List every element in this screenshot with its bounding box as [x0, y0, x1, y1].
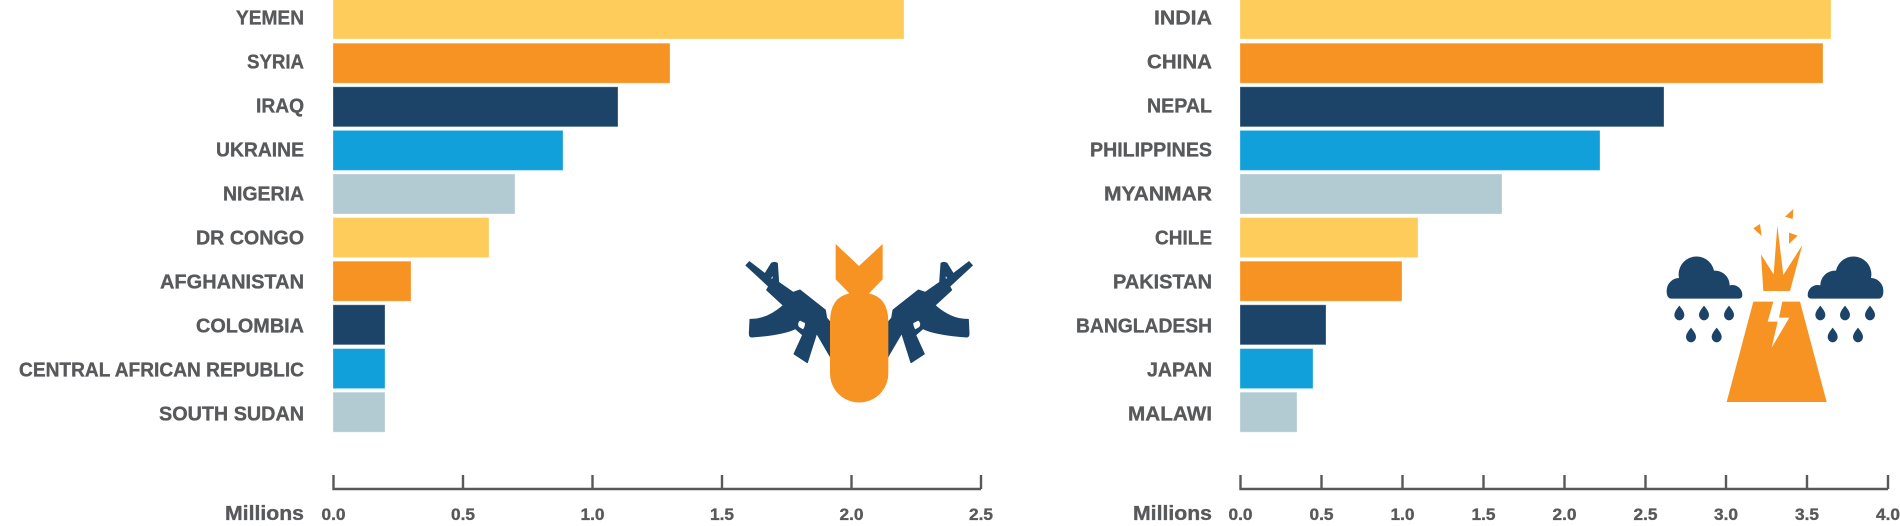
country labels: disasters: MALAWI — [1128, 404, 1212, 426]
country labels: disasters — [1076, 7, 1213, 426]
country labels: conflict: DR CONGO — [196, 228, 304, 250]
icon: right rifle — [888, 262, 972, 363]
axis: conflict: 2.0 — [840, 505, 864, 524]
axis: disasters: 2.0 — [1552, 505, 1576, 524]
axis: conflict: Millions — [225, 503, 304, 525]
country labels: disasters: PAKISTAN — [1113, 272, 1212, 294]
axis: disasters: 4.0 — [1876, 505, 1900, 524]
country labels: disasters: MYANMAR — [1104, 184, 1213, 206]
axis: conflict — [225, 475, 993, 525]
axis: disasters: 1.0 — [1390, 505, 1414, 524]
icon: volcano with rain clouds — [1667, 209, 1883, 402]
panel: disasters chart — [1076, 0, 1900, 525]
country labels: conflict: UKRAINE — [216, 139, 304, 161]
country labels: disasters: PHILIPPINES — [1090, 139, 1212, 161]
country labels: conflict: YEMEN — [236, 7, 304, 29]
country labels: disasters: JAPAN — [1147, 360, 1212, 382]
country labels: disasters: CHILE — [1155, 228, 1212, 250]
bar chart: conflict — [333, 0, 904, 432]
icon: rain drops — [1674, 306, 1875, 342]
axis: conflict: 2.5 — [969, 505, 993, 524]
panel: conflict chart — [19, 0, 993, 525]
country labels: conflict: CENTRAL AFRICAN REPUBLIC — [19, 360, 304, 382]
bar chart: disasters — [1240, 0, 1831, 432]
icon: right cloud — [1808, 256, 1883, 299]
country labels: conflict: COLOMBIA — [196, 316, 304, 338]
country labels: disasters: INDIA — [1154, 7, 1212, 29]
axis: conflict: 0.0 — [322, 505, 346, 524]
axis: conflict: 0.5 — [451, 505, 475, 524]
country labels: conflict: SYRIA — [247, 51, 304, 73]
country labels: disasters: BANGLADESH — [1076, 316, 1212, 338]
axis: disasters: 0.0 — [1228, 505, 1252, 524]
axis: disasters: 3.5 — [1795, 505, 1819, 524]
country labels: conflict — [19, 7, 304, 426]
axis: conflict: 1.0 — [580, 505, 604, 524]
axis: disasters: 0.5 — [1310, 505, 1334, 524]
axis: disasters — [1133, 475, 1900, 525]
icon: volcano cone — [1727, 302, 1827, 402]
country labels: conflict: AFGHANISTAN — [160, 272, 304, 294]
icon: eruption — [1761, 226, 1802, 291]
axis: conflict: 1.5 — [710, 505, 734, 524]
icon: left cloud — [1667, 256, 1742, 299]
axis: disasters: Millions — [1133, 503, 1212, 525]
icon: bomb — [830, 244, 888, 402]
country labels: conflict: NIGERIA — [223, 184, 304, 206]
country labels: disasters: NEPAL — [1147, 95, 1212, 117]
icon: left rifle — [746, 262, 831, 363]
axis: disasters: 3.0 — [1714, 505, 1738, 524]
country labels: disasters: CHINA — [1147, 51, 1212, 73]
axis: disasters: 2.5 — [1634, 505, 1658, 524]
country labels: conflict: IRAQ — [256, 95, 304, 117]
icon: debris — [1753, 209, 1798, 244]
icon: bomb and crossed rifles — [746, 244, 972, 402]
country labels: conflict: SOUTH SUDAN — [159, 404, 304, 426]
axis: disasters: 1.5 — [1472, 505, 1496, 524]
